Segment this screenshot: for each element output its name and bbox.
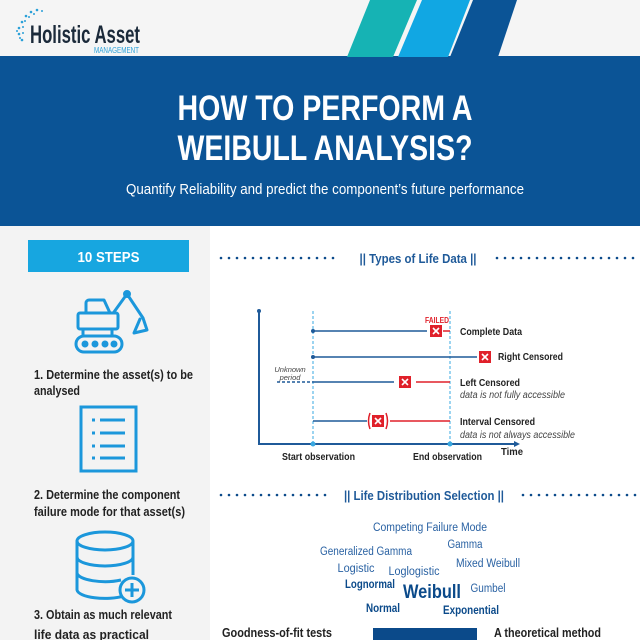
word cloud: distributions: Weibull [403, 582, 461, 603]
goodness-of-fit label: Goodness-of-fit tests [222, 626, 332, 640]
icon: excavator [76, 292, 147, 352]
step 1 text: analysed [34, 383, 80, 398]
word cloud: distributions: Mixed Weibull [456, 558, 520, 570]
word cloud: distributions: Loglogistic [388, 566, 440, 578]
icon: document [81, 407, 136, 471]
chart: life data types [257, 309, 575, 463]
step 1 text [34, 367, 193, 398]
word cloud: distributions: Competing Failure Mode [373, 522, 487, 534]
chart: life data types: Right Censored [498, 351, 563, 363]
title: WEIBULL ANALYSIS? [178, 129, 472, 168]
chart: life data types: Interval Censored [460, 416, 535, 428]
chart: life data types: Left Censored [460, 377, 520, 389]
word cloud: distributions [320, 522, 520, 617]
top bar [0, 0, 640, 58]
logo [16, 9, 140, 55]
header band [0, 58, 640, 226]
chart: life data types: Complete Data [460, 326, 522, 338]
chart: life data types: data is not always accessible [460, 430, 575, 441]
word cloud: distributions: Normal [366, 603, 400, 615]
chart: life data types: period [279, 373, 301, 382]
heading: types of life data: || Types of Life Data || [360, 251, 476, 266]
icon: database [77, 532, 144, 602]
step 1 text: 1. Determine the asset(s) to be [34, 367, 193, 382]
word cloud: distributions: Exponential [443, 605, 499, 617]
steps label [28, 240, 189, 272]
word cloud: distributions: Gamma [448, 539, 483, 551]
logo: MANAGEMENT [94, 46, 139, 55]
chart: life data types: data is not fully accessible [460, 390, 565, 401]
word cloud: distributions: Gumbel [470, 583, 506, 595]
word cloud: distributions: Lognormal [345, 579, 395, 591]
chart: life data types: Unknown [274, 365, 306, 374]
step 2 text: failure mode for that asset(s) [34, 504, 185, 519]
decorative stripes [347, 0, 517, 57]
word cloud: distributions: Logistic [338, 563, 375, 575]
step 3 text: 3. Obtain as much relevant [34, 607, 173, 622]
chart: life data types: Start observation [282, 451, 355, 463]
chart: life data types: FAILED [425, 316, 449, 325]
theoretical method label: A theoretical method [494, 626, 601, 640]
logo: Holistic Asset [30, 21, 140, 49]
title [178, 89, 472, 168]
panel: steps [0, 226, 210, 640]
blue block [373, 628, 477, 640]
steps label: 10 STEPS [78, 249, 140, 266]
heading: life distribution selection: || Life Distribution Selection || [344, 488, 504, 503]
step 3 text [34, 607, 173, 640]
chart: life data types: End observation [413, 451, 482, 463]
subtitle: Quantify Reliability and predict the component’s future performance [126, 181, 524, 198]
step 2 text [34, 487, 185, 519]
word cloud: distributions: Generalized Gamma [320, 546, 413, 558]
title: HOW TO PERFORM A [178, 89, 472, 128]
chart: life data types: Time [501, 446, 523, 458]
step 2 text: 2. Determine the component [34, 487, 181, 502]
